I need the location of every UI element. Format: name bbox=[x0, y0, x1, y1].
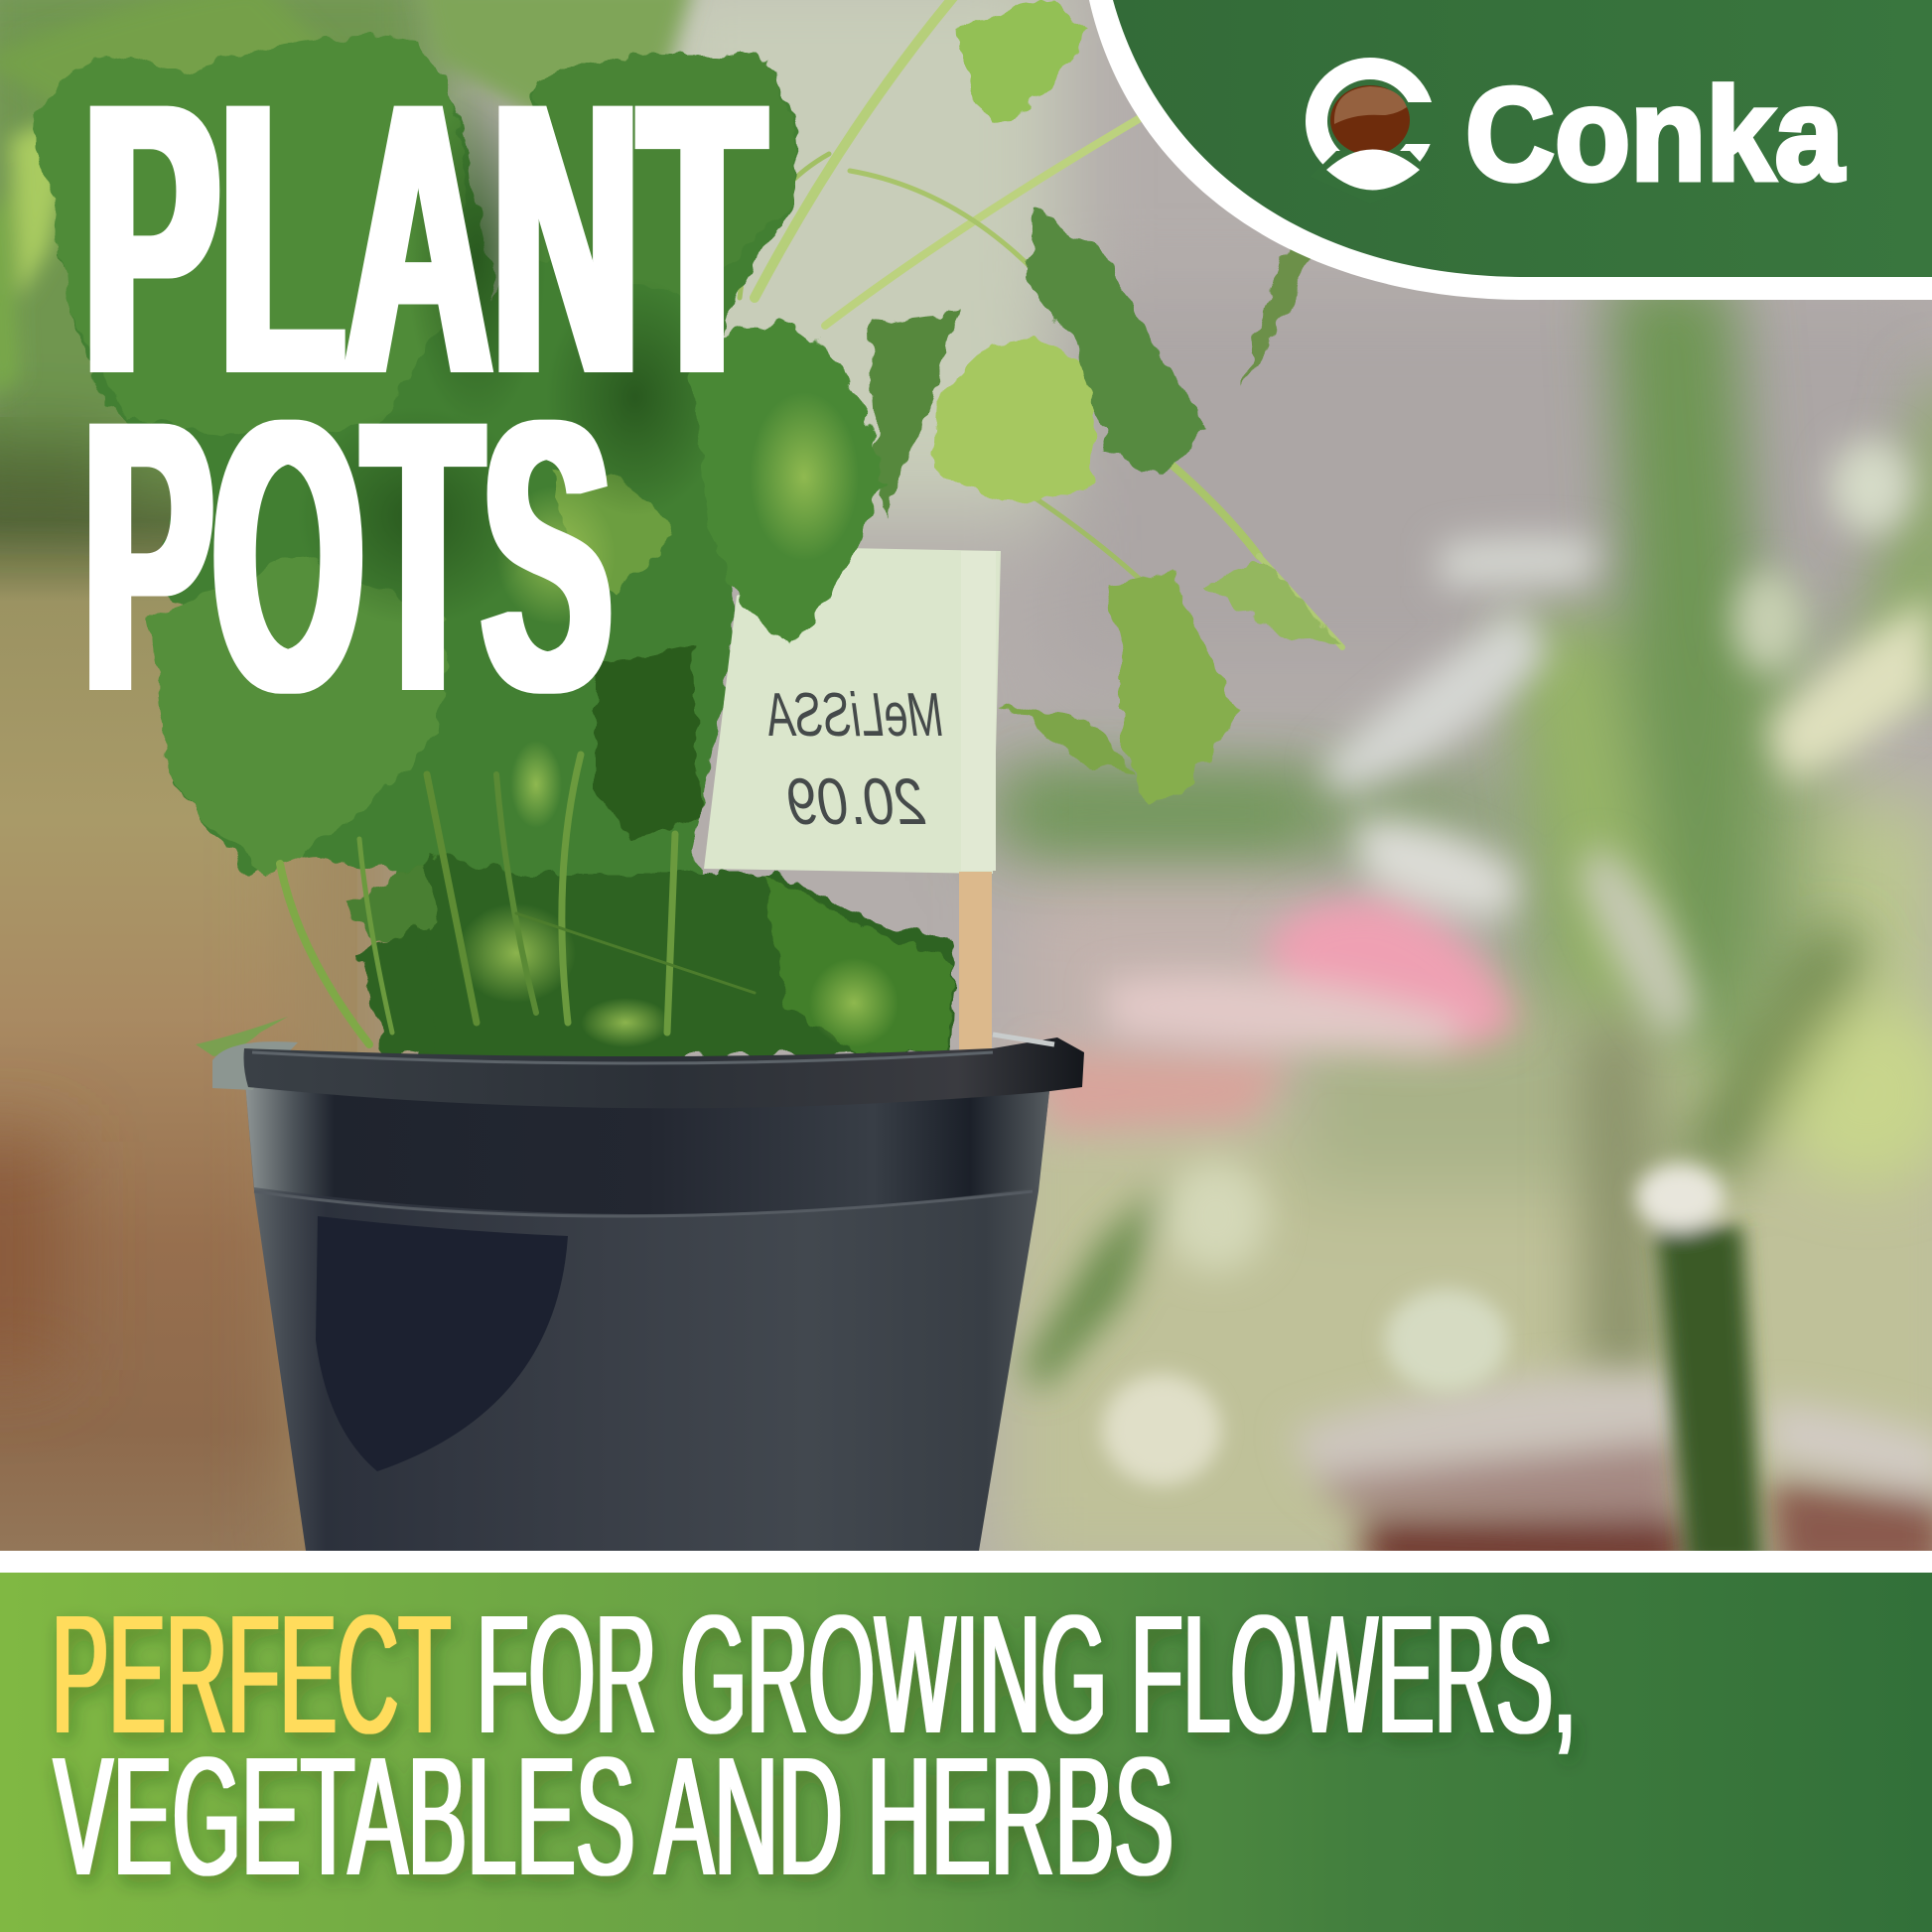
leaf glow bbox=[757, 402, 852, 551]
icon: seed in ring bbox=[1311, 69, 1443, 204]
bottom band: green gradient bbox=[0, 1573, 1932, 1932]
leaves: plant foliage bbox=[30, 0, 1340, 1062]
tagline bbox=[52, 1581, 1577, 1911]
plant label with mirrored handwriting: MeLiSSA bbox=[766, 681, 943, 750]
stems: upper right bbox=[740, 0, 1342, 647]
blurred back leaves bbox=[0, 0, 695, 397]
leaf highlights, shadows and stems inside plant bbox=[280, 89, 898, 1047]
title: PLANT POTS: POTS bbox=[83, 340, 612, 772]
title: PLANT POTS bbox=[83, 22, 764, 772]
wooden stake bbox=[959, 872, 992, 1054]
plant label with mirrored handwriting bbox=[704, 548, 1001, 874]
small leaf on pot rim bbox=[196, 1017, 288, 1056]
top-right brand panel: green fill bbox=[1113, 0, 1932, 277]
top-right brand panel: white outline bbox=[1089, 0, 1932, 300]
tagline: PERFECT bbox=[52, 1581, 451, 1769]
logo: Conka bbox=[1311, 62, 1845, 208]
wordmark: Conka bbox=[1465, 62, 1845, 208]
title: PLANT POTS: PLANT bbox=[83, 22, 764, 455]
plant pot bbox=[212, 1035, 1084, 1551]
large leaf hanging over label bbox=[690, 325, 884, 645]
plant label with mirrored handwriting: 20.09 bbox=[787, 764, 926, 838]
